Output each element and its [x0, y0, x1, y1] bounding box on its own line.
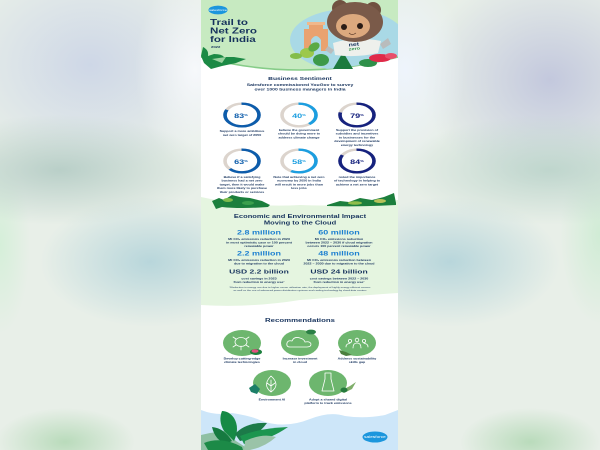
stat 60 million	[306, 229, 373, 248]
caption 63: target, then it would make	[220, 183, 265, 186]
recommendation: cloud: Increase investment	[283, 357, 317, 360]
recommendation: shared platform: platform to track emissions	[304, 401, 352, 405]
donut 83	[225, 104, 259, 126]
stat 2.8 million: in most optimistic case or 100 percent	[226, 241, 292, 244]
recommendation: environment	[249, 370, 291, 401]
logo	[208, 6, 228, 14]
stat USD 2.2 billion: USD 2.2 billion	[229, 268, 289, 275]
recommendation: skills	[338, 330, 377, 364]
title: Trail to	[210, 19, 248, 27]
recommendation: cloud: in cloud	[293, 360, 307, 364]
salesforce logo: salesforce	[364, 435, 387, 439]
stat 2.2 million: due to migration to the cloud	[234, 262, 284, 265]
caption 58: economy by 2050 in India	[277, 179, 321, 183]
recommendation: climate technologies	[223, 330, 262, 364]
sky and India Gate	[290, 10, 398, 69]
stat USD 2.2 billion	[230, 270, 288, 284]
stat 2.2 million: Mt CO₂ emissions reduction in 2023	[228, 259, 290, 262]
stat 2.8 million: renewable power	[244, 245, 275, 248]
recommendation: shared platform: Adopt a shared digital	[309, 398, 347, 401]
caption 40: address climate change	[278, 136, 320, 139]
shirt text: zero	[348, 46, 360, 52]
stat USD 24 billion: USD 24 billion	[310, 268, 368, 275]
panel: economic and environmental impact	[201, 193, 398, 306]
donut 79	[340, 104, 374, 126]
caption 79: development of renewable	[334, 140, 380, 143]
caption 63: them more likely to purchase	[217, 187, 267, 190]
caption 58: will result in more jobs than	[274, 183, 323, 186]
header banner	[201, 0, 406, 71]
caption 63: business had a net zero	[221, 179, 263, 183]
donut 40: 40	[292, 112, 302, 120]
survey intro: over 1000 business managers in India	[254, 87, 346, 91]
caption 40: believe the government	[279, 129, 319, 132]
header plants	[201, 41, 397, 69]
caption 79: subsidies and incentives	[336, 132, 379, 136]
right plants	[327, 193, 396, 206]
donut 58: %	[302, 160, 307, 163]
impact heading: Moving to the Cloud	[264, 220, 336, 226]
donut 83: %	[244, 114, 249, 117]
donut 63	[225, 150, 259, 172]
recommendation: environment: Environment AI	[259, 398, 285, 401]
caption 58: Note that achieving a net zero	[273, 176, 325, 179]
donut 84	[340, 150, 374, 172]
donut 40	[282, 104, 316, 126]
recommendation: skills: Address sustainability	[338, 357, 377, 360]
donut 79: %	[360, 114, 365, 117]
stat 2.8 million: 2.8 million	[237, 229, 281, 236]
recommendation: climate technologies: climate technologies	[224, 360, 260, 364]
caption 84: achieve a net zero target	[336, 183, 378, 186]
donut 84: %	[360, 160, 365, 163]
caption 40: should be doing more to	[278, 132, 320, 136]
stat 60 million: occurs 100 percent renewable power	[307, 245, 372, 248]
year: 2022	[211, 46, 220, 49]
stat USD 2.2 billion: from reduction in energy use¹	[233, 281, 285, 284]
heading: business sentiment: Business Sentiment	[268, 77, 332, 82]
footnote: as well as the use of advanced power distribution systems and cooling technology by cloud data centers	[233, 289, 367, 292]
recommendation: skills: skills gap	[349, 360, 365, 364]
donut 83: 83	[234, 112, 244, 120]
infographic panel	[201, 0, 406, 450]
stat 48 million	[303, 250, 375, 265]
stat 2.8 million	[226, 229, 292, 248]
stat 48 million: 2022 – 2030 due to migration to the cloud	[303, 262, 375, 265]
stat 48 million: Mt CO₂ emissions reduction between	[307, 259, 371, 262]
title: Net Zero	[210, 27, 257, 36]
stat 60 million: Mt CO₂ emissions reduction	[315, 238, 363, 241]
stat 2.8 million: Mt CO₂ emissions reduction in 2023	[228, 238, 290, 241]
footer sky	[201, 410, 398, 450]
caption 84: of technology in helping to	[334, 179, 380, 183]
caption 84: noted the importance	[339, 176, 376, 179]
recommendation: shared platform	[304, 370, 356, 405]
survey intro: Salesforce commissioned YouGov to survey	[247, 83, 354, 87]
caption 63: their products or services	[220, 190, 265, 194]
donut 79: 79	[350, 112, 360, 120]
logo: salesforce	[209, 9, 227, 12]
stat 60 million: between 2022 – 2030 if cloud migration	[306, 241, 373, 244]
donut 84: 84	[350, 158, 360, 166]
donut 40: %	[302, 114, 307, 117]
caption 79: energy technology	[341, 143, 373, 147]
salesforce logo	[362, 432, 388, 442]
caption 79: Support the provision of	[336, 129, 379, 132]
stat USD 24 billion: cost savings between 2022 – 2030	[310, 277, 369, 280]
caption 83: Support a more ambitious	[220, 130, 265, 133]
mascot	[325, 0, 391, 56]
stat 48 million: 48 million	[318, 250, 360, 257]
stat USD 24 billion	[310, 270, 368, 284]
donut 58	[282, 150, 316, 172]
caption 63: Believe if a satisfying	[224, 176, 261, 179]
donut 63: 63	[234, 158, 244, 166]
recommendation: cloud	[281, 330, 319, 364]
heading: recommendations: Recommendations	[265, 318, 335, 324]
donut 58: 58	[292, 158, 302, 166]
caption 58: less jobs	[291, 187, 307, 190]
footnote: ¹Reduction in energy use due to higher server utilization rate, the deployment of highly energy efficient servers	[230, 286, 371, 289]
shirt text: net	[348, 41, 359, 48]
title: for India	[210, 36, 256, 44]
footer leaves	[201, 411, 288, 450]
stat 2.2 million	[228, 250, 290, 265]
impact heading: Economic and Environmental Impact	[234, 214, 367, 220]
stat USD 2.2 billion: cost savings in 2023	[241, 277, 277, 280]
stat 60 million: 60 million	[318, 229, 360, 236]
stat USD 24 billion: from reduction in energy use¹	[313, 281, 365, 284]
recommendation: climate technologies: Develop cutting-edge	[224, 357, 261, 360]
caption 79: to businesses for the	[339, 136, 376, 139]
donut 63: %	[244, 160, 249, 163]
left plants	[212, 195, 270, 209]
stat 2.2 million: 2.2 million	[237, 250, 281, 257]
caption 83: net zero target of 2050	[223, 133, 262, 137]
